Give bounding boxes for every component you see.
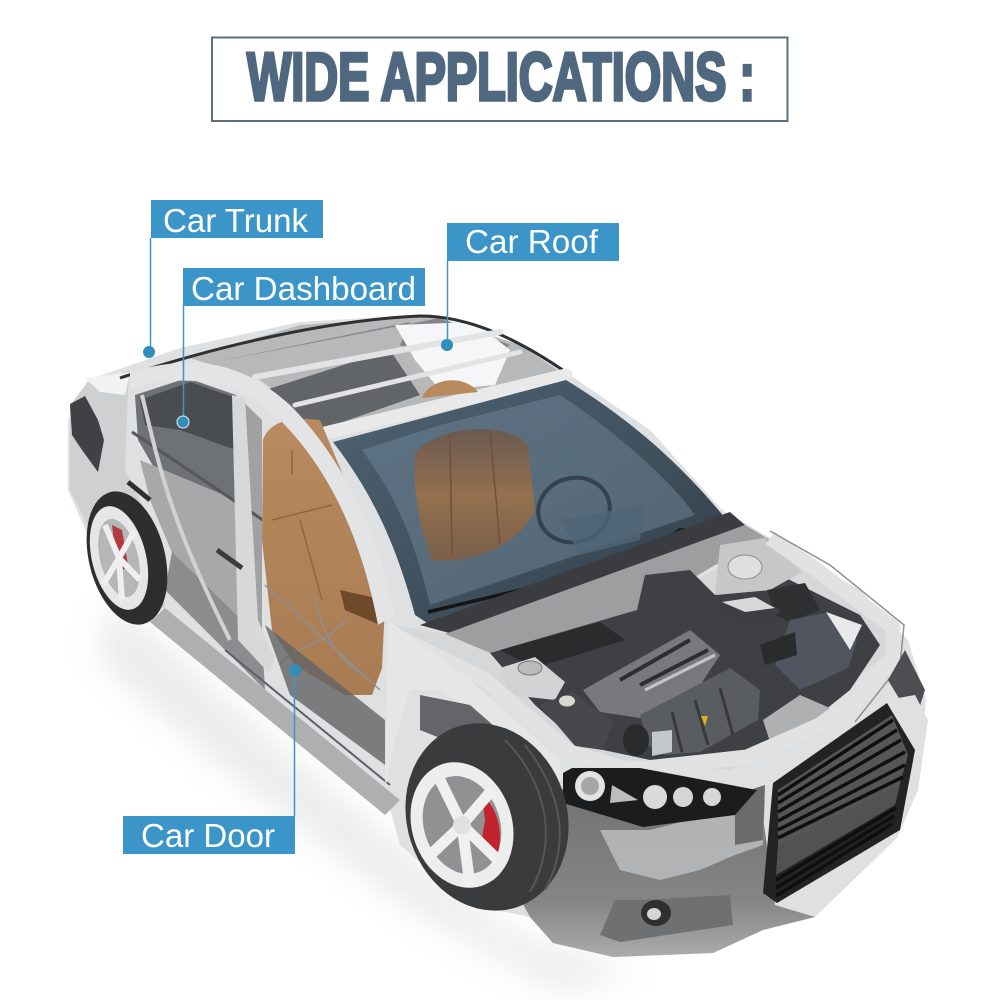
windshield wipers bbox=[428, 530, 722, 612]
sill bbox=[150, 608, 400, 815]
door handles bbox=[128, 482, 150, 500]
right corner lamp bbox=[888, 650, 925, 712]
belt line bbox=[132, 432, 300, 545]
hood rim bbox=[395, 538, 893, 770]
front wheel bbox=[382, 702, 592, 932]
callout: car trunk: Car Trunk bbox=[163, 202, 308, 239]
callout: car trunk bbox=[143, 200, 323, 358]
strut tower bbox=[500, 657, 565, 700]
intake manifold bbox=[640, 668, 760, 755]
rear wheel bbox=[74, 483, 180, 633]
grille bbox=[763, 703, 915, 903]
lower right bay bbox=[763, 695, 830, 742]
steering wheel bbox=[531, 470, 617, 550]
callout: car roof bbox=[441, 223, 619, 351]
pulley bbox=[623, 724, 649, 756]
title bbox=[212, 38, 788, 121]
callout: car dashboard: Car Dashboard bbox=[191, 270, 416, 307]
car illustration bbox=[68, 314, 928, 957]
oil cap bbox=[701, 716, 708, 726]
washer tank bbox=[540, 692, 613, 750]
car body bbox=[68, 314, 926, 957]
bumper right bbox=[887, 695, 928, 838]
engine firewall details bbox=[500, 622, 625, 668]
A pillar bbox=[130, 363, 395, 625]
fender panel bbox=[385, 620, 563, 790]
hood glass bbox=[445, 525, 770, 653]
coolant bottle bbox=[652, 730, 672, 756]
ground shadow bbox=[100, 600, 640, 990]
side interior bbox=[135, 378, 240, 500]
wiring bbox=[265, 585, 380, 690]
lower translucent bumper bbox=[510, 770, 815, 957]
right box bbox=[767, 583, 820, 622]
front seat bbox=[262, 419, 385, 695]
engine bay bbox=[490, 570, 880, 760]
callout: car roof: Car Roof bbox=[465, 223, 599, 260]
roof edge bbox=[120, 316, 570, 378]
callout: car door: Car Door bbox=[141, 817, 275, 854]
callout: car dashboard bbox=[177, 268, 425, 428]
air filter box bbox=[775, 612, 857, 690]
rear seat headrest bbox=[422, 380, 478, 398]
fog lamp bbox=[641, 900, 671, 926]
title: WIDE APPLICATIONS : bbox=[247, 39, 755, 115]
windshield bbox=[333, 380, 725, 628]
roof bars bbox=[255, 332, 566, 433]
B pillar bbox=[232, 395, 275, 672]
battery bbox=[718, 596, 780, 627]
callout: car door bbox=[123, 664, 301, 854]
headlight bbox=[563, 768, 757, 827]
engine cover bbox=[583, 630, 720, 718]
door lower panel bbox=[265, 625, 385, 765]
hood inner light bbox=[395, 540, 893, 770]
rear body section bbox=[70, 370, 165, 610]
cowl bbox=[420, 512, 745, 636]
windshield seat bbox=[414, 429, 535, 561]
roof interior bbox=[190, 316, 565, 438]
